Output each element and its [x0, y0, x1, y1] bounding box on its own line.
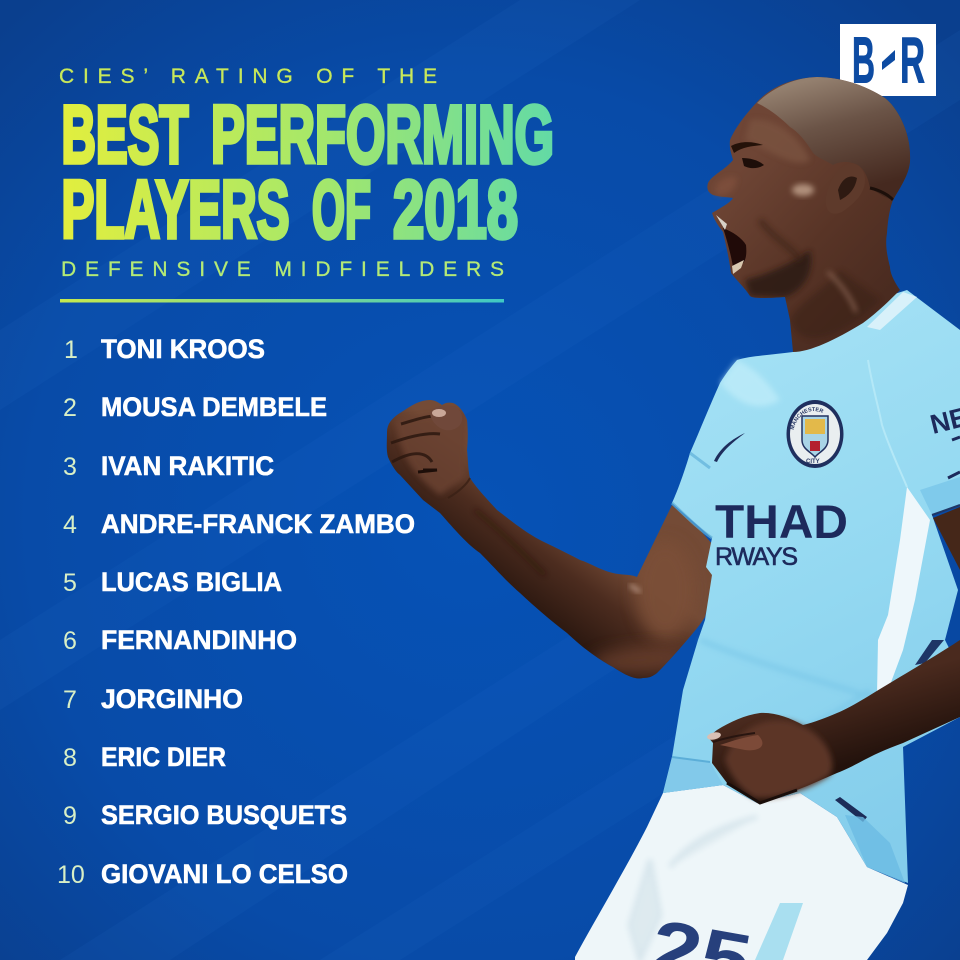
side panel [877, 487, 930, 695]
row 10: GIOVANI LO CELSO [101, 859, 348, 889]
swoosh [714, 433, 745, 462]
row 5: LUCAS BIGLIA [101, 567, 282, 597]
shirt [663, 290, 960, 883]
crest [786, 400, 844, 468]
shorts [575, 785, 908, 960]
title rule [60, 299, 504, 302]
row 1: 1 [64, 336, 78, 364]
sponsor text [715, 495, 848, 571]
raglan seam and folds [868, 360, 907, 487]
kicker: CIES' rating of the: CIES’ RATING OF THE [59, 65, 437, 88]
sponsor text: THAD [715, 495, 848, 548]
raised arm [387, 400, 714, 678]
nose [716, 177, 737, 195]
title: PLAYERS [62, 164, 290, 256]
row 10: 10 [57, 861, 85, 889]
collar trim [867, 292, 917, 330]
row 6: FERNANDINHO [101, 625, 297, 655]
row 4: 4 [63, 511, 77, 539]
row 8: 8 [63, 744, 77, 772]
row 9: SERGIO BUSQUETS [101, 800, 347, 830]
upper arm behind sleeve [933, 507, 960, 570]
sleeve text [927, 402, 960, 478]
sponsor text: RWAYS [715, 543, 798, 571]
row 3: IVAN RAKITIC [101, 451, 274, 481]
row 2: MOUSA DEMBELE [101, 392, 327, 422]
row 7: 7 [63, 686, 77, 714]
title: BEST [62, 90, 188, 180]
head [707, 77, 910, 352]
player photo illustration [386, 77, 960, 960]
subtitle: defensive midfielders: DEFENSIVE MIDFIELDERS [61, 258, 504, 281]
logo: Bleacher Report: B [852, 24, 875, 96]
back number patch [915, 640, 944, 665]
row 1: TONI KROOS [101, 334, 265, 364]
row 7: JORGINHO [101, 684, 243, 714]
crest: MANCHESTER [790, 407, 824, 430]
open mouth [716, 215, 746, 274]
row 6: 6 [63, 627, 77, 655]
crest: CITY [806, 459, 820, 465]
hem band and shirt shadow [663, 757, 905, 883]
row 2: 2 [63, 394, 77, 422]
logo: Bleacher Report [840, 24, 936, 96]
title [62, 90, 554, 256]
lower arm and hand [706, 640, 960, 803]
row 4: ANDRE-FRANCK ZAMBO [101, 509, 415, 539]
row 3: 3 [63, 453, 77, 481]
forehead and cheek shading [748, 122, 808, 162]
row 9: 9 [63, 802, 77, 830]
title: OF [312, 164, 371, 256]
ranking list [57, 334, 415, 889]
raised fist [391, 405, 470, 498]
brow and eye [731, 142, 764, 168]
row 8: ERIC DIER [101, 742, 226, 772]
title: 2018 [393, 164, 518, 256]
ear [826, 163, 865, 214]
row 5: 5 [63, 569, 77, 597]
title: PERFORMING [211, 90, 554, 180]
hair [757, 77, 910, 200]
sleeve hem [920, 477, 960, 515]
logo: Bleacher Report: R [900, 24, 925, 96]
